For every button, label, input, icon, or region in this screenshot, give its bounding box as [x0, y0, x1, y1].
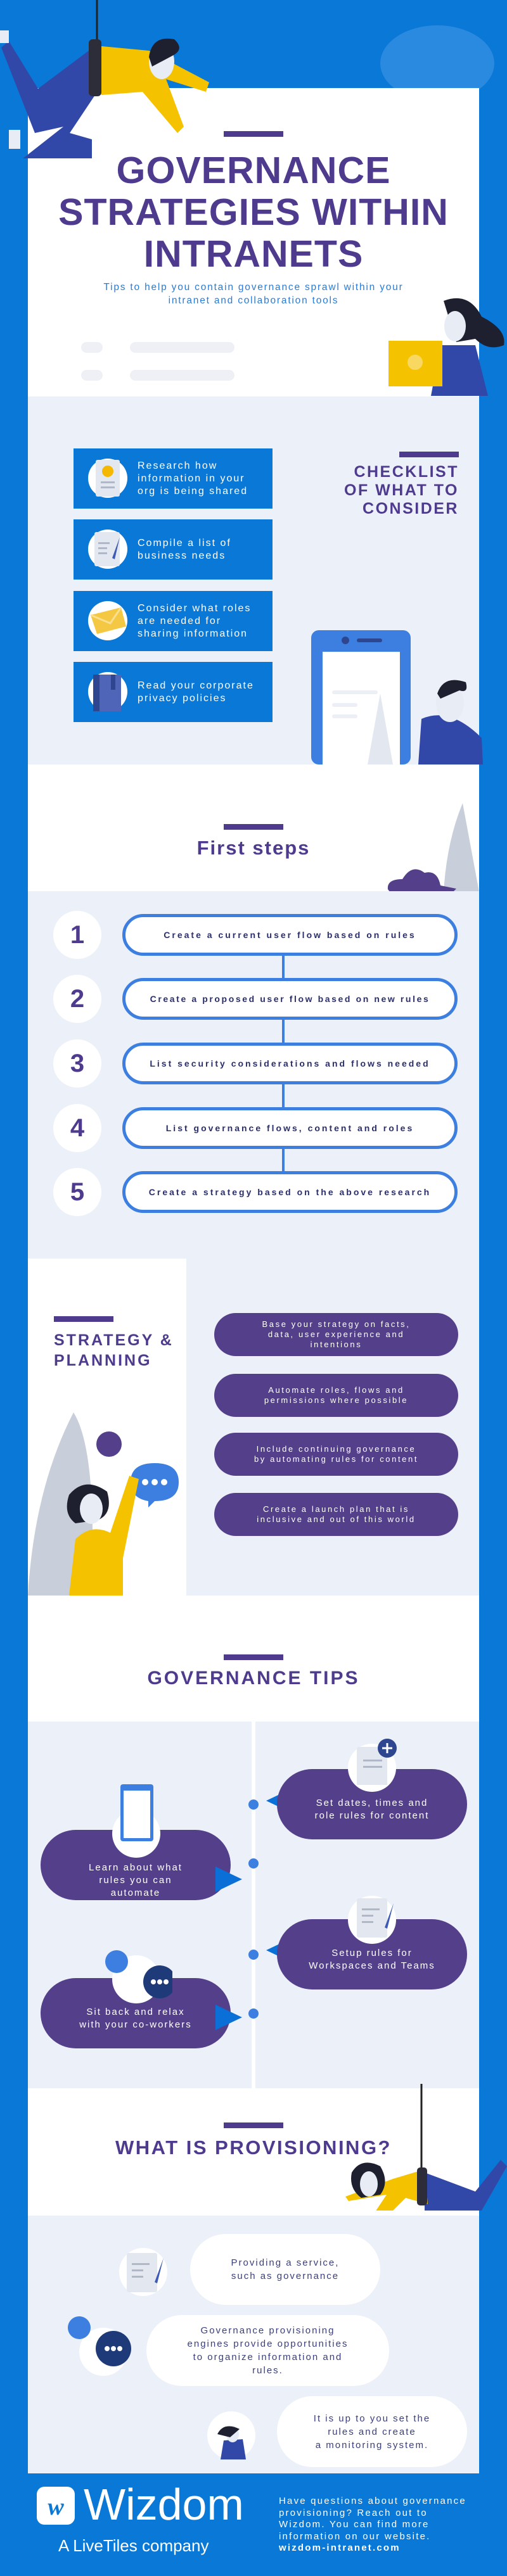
illustration: woman with chat [28, 1412, 179, 1596]
first steps heading: First steps [197, 837, 310, 859]
step 1: 1 [70, 921, 84, 949]
provisioning heading: WHAT IS PROVISIONING? [115, 2136, 392, 2159]
first steps heading [197, 824, 310, 859]
strategy item 4: Create a launch plan that is [263, 1504, 409, 1514]
tip: set dates: Set dates, times and [316, 1798, 428, 1808]
footer text: Have questions about governance provisioning? Reach out to Wizdom. You can find more information on our website. [279, 2496, 466, 2541]
step 3 [53, 1039, 458, 1088]
panel: first steps header [28, 765, 479, 891]
step 4 [53, 1104, 458, 1152]
strategy heading [54, 1316, 174, 1369]
panel: provisioning header [28, 2088, 479, 2216]
strategy item 3: by automating rules for content [254, 1454, 418, 1464]
checklist item 2: Compile a list of business needs [138, 537, 231, 561]
step 2: Create a proposed user flow based on new rules [150, 994, 430, 1004]
strategy item 1: Base your strategy on facts, [262, 1319, 410, 1329]
step 3: 3 [70, 1050, 84, 1077]
title: INTRANETS [144, 233, 363, 275]
title: GOVERNANCE [117, 149, 390, 191]
strategy item 1: intentions [311, 1340, 362, 1349]
checklist heading: CHECKLIST [354, 463, 459, 481]
governance tips heading [147, 1654, 360, 1689]
step 5: Create a strategy based on the above research [149, 1187, 431, 1197]
strategy item 4: inclusive and out of this world [257, 1514, 416, 1524]
tip: set dates [266, 1739, 467, 1839]
tip: setup workspaces: Setup rules for [331, 1948, 413, 1958]
step 4: 4 [70, 1114, 84, 1142]
strategy item 2 [214, 1374, 458, 1417]
footer logo: A LiveTiles company [58, 2536, 209, 2555]
panel: tips [28, 1722, 479, 2088]
tip dots [248, 1799, 259, 1810]
checklist item 4 [74, 662, 273, 722]
illustration: hanging woman [345, 2084, 507, 2211]
checklist item 4: Read your corporate privacy policies [138, 680, 254, 703]
panel: provisioning [28, 2216, 479, 2473]
placeholder lines [81, 342, 234, 381]
governance tips heading: GOVERNANCE TIPS [147, 1668, 360, 1689]
provisioning item 3: a monitoring system. [316, 2440, 428, 2450]
illustration: woman with laptop [388, 298, 504, 396]
strategy item 2: permissions where possible [264, 1395, 408, 1405]
step 5: 5 [70, 1178, 84, 1206]
strategy item 1: data, user experience and [268, 1329, 404, 1339]
illustration: phone and man [311, 630, 483, 765]
tip: setup workspaces: Workspaces and Teams [309, 1960, 435, 1971]
tip: sit back and relax [41, 1950, 242, 2048]
checklist heading [344, 452, 459, 517]
strategy item 3: Include continuing governance [257, 1444, 416, 1454]
checklist item 3 [74, 591, 273, 651]
provisioning item 2: Governance provisioning [201, 2325, 335, 2336]
panel: steps [28, 891, 479, 1596]
footer logo: w [48, 2494, 64, 2520]
strategy item 2: Automate roles, flows and [268, 1385, 404, 1395]
tip: sit back and relax: with your co-workers [79, 2019, 192, 2030]
step 2: 2 [70, 985, 84, 1013]
provisioning item 1: Providing a service, [231, 2257, 339, 2268]
checklist item 3: Consider what roles are needed for sharing information [138, 603, 251, 638]
step 1 [53, 911, 458, 959]
step 1: Create a current user flow based on rules [164, 930, 416, 940]
footer logo: Wizdom [84, 2480, 244, 2529]
strategy heading: STRATEGY & [54, 1331, 174, 1349]
decorative background shape [380, 25, 494, 101]
step 3: List security considerations and flows needed [150, 1058, 430, 1069]
subtitle [103, 282, 404, 306]
provisioning item 3: It is up to you set the [314, 2413, 430, 2423]
provisioning heading [115, 2122, 392, 2159]
panel: tips header [28, 1596, 479, 1722]
step 2 [53, 975, 458, 1023]
provisioning item 3 [207, 2396, 467, 2467]
title: STRATEGIES WITHIN [58, 191, 449, 233]
provisioning item 2: engines provide opportunities [188, 2338, 348, 2349]
strategy item 1 [214, 1313, 458, 1356]
header panel [28, 88, 479, 397]
tip: sit back and relax: Sit back and relax [86, 2007, 185, 2017]
step connector [282, 935, 285, 1192]
title [58, 149, 449, 275]
provisioning item 3: rules and create [328, 2426, 416, 2437]
tip: learn about rules: rules you can [99, 1875, 172, 1886]
footer text: wizdom-intranet.com [279, 2542, 401, 2553]
footer logo [37, 2480, 244, 2555]
checklist heading: CONSIDER [363, 500, 459, 517]
provisioning item 2: to organize information and [193, 2352, 342, 2363]
illustration: plant [388, 803, 479, 891]
provisioning item 2: rules. [252, 2365, 283, 2376]
checklist item 1: Research how information in your org is being shared [138, 460, 248, 497]
tip: learn about rules: Learn about what [89, 1862, 183, 1873]
checklist item 1 [74, 448, 273, 509]
tips divider [252, 1722, 255, 2088]
step 5 [53, 1168, 458, 1216]
provisioning item 2 [68, 2315, 389, 2386]
tip: set dates: role rules for content [315, 1810, 429, 1821]
strategy item 4 [214, 1493, 458, 1536]
panel: checklist [28, 397, 479, 765]
provisioning item 1: such as governance [231, 2271, 339, 2281]
panel: strategy left [28, 1259, 186, 1596]
checklist heading: OF WHAT TO [344, 481, 459, 499]
subtitle: intranet and collaboration tools [169, 295, 338, 306]
strategy heading: PLANNING [54, 1352, 152, 1369]
strategy item 3 [214, 1433, 458, 1476]
subtitle: Tips to help you contain governance sprawl within your [103, 282, 404, 293]
tip: learn about rules [41, 1784, 242, 1900]
illustration: hanging man [0, 0, 209, 158]
checklist item 2 [74, 519, 273, 580]
title bar [224, 131, 283, 137]
provisioning item 1 [119, 2234, 380, 2305]
step 4: List governance flows, content and roles [166, 1123, 414, 1133]
tip: setup workspaces [266, 1896, 467, 1989]
tip: learn about rules: automate [111, 1888, 160, 1898]
